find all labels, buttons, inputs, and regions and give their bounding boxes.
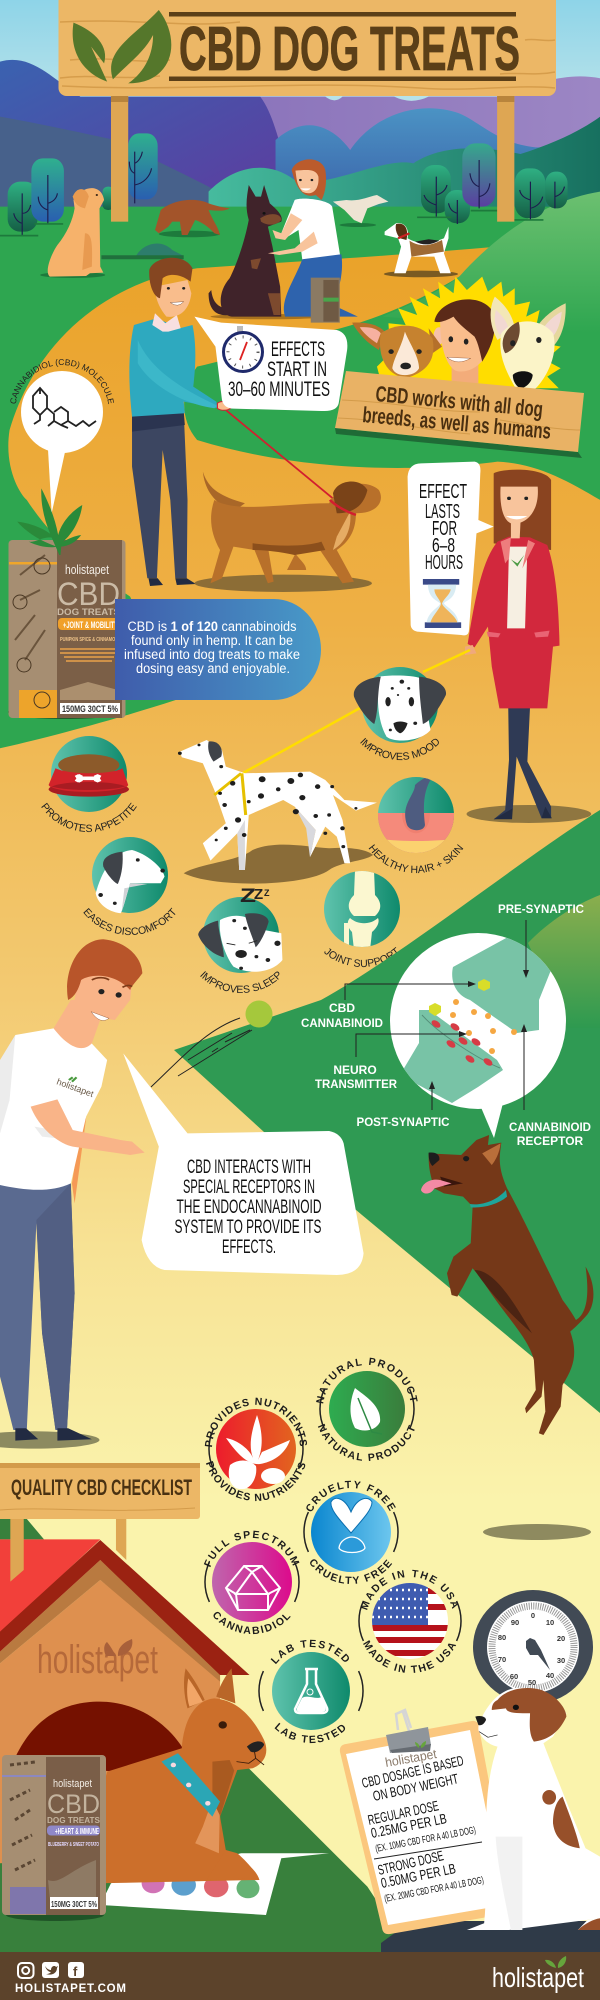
man head [67, 939, 142, 1020]
shadow [0, 1431, 100, 1449]
treat bag: joint and mobility: +JOINT & MOBILITY [63, 620, 118, 631]
neck [54, 1000, 107, 1048]
scale platform [381, 1921, 600, 1952]
treat bag: joint and mobility: DOG TREATS [57, 607, 120, 617]
pre-synaptic shape [452, 938, 550, 1033]
shadow [467, 805, 591, 823]
shadow [184, 845, 373, 884]
molecule callout [10, 359, 114, 512]
label: HEALTHY HAIR + SKIN [368, 844, 464, 874]
badge: made in the USA [358, 1570, 462, 1673]
badge: full spectrum cannabidiol: FULL SPECTRUM [204, 1530, 300, 1568]
speech bubble: effects start: EFFECTS [271, 338, 325, 361]
grass and green areas [0, 192, 600, 748]
man in white t-shirt: holistapet [55, 1076, 95, 1099]
speech bubble: endocannabinoid: CBD INTERACTS WITH [187, 1157, 311, 1178]
wall [0, 1580, 220, 1863]
icon: improves sleep [198, 886, 282, 993]
badge: natural product: NATURAL PRODUCT [318, 1424, 415, 1461]
shirt logo [69, 1077, 77, 1082]
speech bubble: effect lasts: FOR [432, 518, 457, 540]
quality checklist sign [0, 1463, 200, 1582]
man with leash [129, 258, 337, 586]
info box: cannabinoids: CBD is 1 of 120 cannabinoids [128, 619, 297, 634]
hair [494, 470, 551, 550]
badge: provides nutrients [204, 1398, 307, 1502]
callout tail [480, 1103, 503, 1138]
jumping dog shadow [483, 1524, 591, 1540]
icon: facebook: f [73, 1964, 78, 1979]
icon: facebook [68, 1962, 84, 1979]
treat bag: heart and immune [2, 1755, 106, 1921]
woman kneeling [268, 159, 358, 317]
treat bag: joint and mobility: CBD [57, 576, 120, 612]
house dog [99, 1668, 266, 1883]
treat bag: heart and immune: BLUEBERRY & SWEET POTATO [48, 1842, 99, 1848]
golden dog sitting [40, 188, 105, 278]
icon: stopwatch [224, 326, 262, 372]
clipboard text: CBD DOSAGE IS BASED [360, 1752, 465, 1791]
molecule diagram [33, 388, 96, 428]
synapse diagram: CANNABINOID [509, 1120, 591, 1134]
badge: made in the USA: MADE IN THE USA [363, 1640, 456, 1673]
clipboard logo: holistapet [384, 1746, 438, 1770]
info box: cannabinoids [115, 599, 321, 700]
scale dial: 80 [498, 1633, 506, 1642]
corgi face [352, 322, 442, 378]
badge: natural product: NATURAL PRODUCT [316, 1358, 418, 1404]
sweater [129, 318, 218, 417]
badge: made in the USA: MADE IN THE USA [360, 1570, 458, 1610]
icon: instagram [18, 1963, 34, 1978]
post-synaptic shape [400, 1010, 503, 1103]
green panel: endocannabinoid background [174, 810, 600, 1413]
roof [0, 1540, 250, 1675]
speech bubble: effect lasts: HOURS [425, 552, 463, 574]
wooden sign: CBD works [335, 371, 584, 458]
website: HOLISTAPET.COM [15, 1983, 126, 1995]
synapse diagram [301, 902, 591, 1148]
label: PROMOTES APPETITE [41, 802, 137, 832]
house logo: holistapet [37, 1638, 158, 1682]
clipboard text: 0.50MG PER LB [379, 1860, 457, 1891]
binder clip [396, 1710, 411, 1731]
greyhound running [333, 195, 388, 227]
icon: improves sleep: Z [264, 888, 270, 898]
speech bubble: effects start [194, 317, 347, 411]
speech bubble: effect lasts: 6–8 [432, 535, 455, 557]
icon: healthy hair and skin [368, 777, 464, 874]
clipboard text: REGULAR DOSE [366, 1797, 440, 1828]
clipboard text: 0.25MG PER LB [369, 1810, 448, 1841]
hand [465, 645, 476, 655]
treat bag: heart and immune: +HEART & IMMUNE [55, 1826, 99, 1836]
badge: cruelty free [303, 1480, 399, 1584]
speech bubble: endocannabinoid [123, 1053, 364, 1275]
badge: lab tested: LAB TESTED [274, 1722, 346, 1744]
scale dial: 50 [528, 1678, 536, 1687]
olive hill [528, 895, 600, 1028]
scale dial: 40 [546, 1671, 554, 1680]
scale dial: 0 [531, 1611, 535, 1620]
collar [152, 313, 181, 332]
zzz: Z [240, 886, 257, 907]
shirt [507, 547, 527, 628]
scale dial: 90 [511, 1618, 519, 1627]
clipboard text: (EX. 10MG CBD FOR A 40 LB DOG) [375, 1825, 477, 1855]
treat bag small [311, 278, 340, 323]
badge: full spectrum cannabidiol: CANNABIDIOL [214, 1612, 291, 1634]
synapse diagram: POST-SYNAPTIC [356, 1115, 450, 1129]
info box: cannabinoids: found only in hemp. It can be [131, 633, 293, 648]
brown dog sniffing [155, 200, 230, 237]
door [15, 1702, 183, 1772]
treat bag: joint and mobility [8, 540, 126, 719]
quality checklist sign: QUALITY CBD CHECKLIST [11, 1475, 192, 1500]
speech bubble: effects start: 30–60 MINUTES [228, 378, 330, 401]
arm [31, 1099, 145, 1155]
coat [468, 537, 560, 708]
dog on scale [467, 1688, 600, 1930]
roof red [0, 1539, 100, 1633]
synapse diagram: RECEPTOR [517, 1134, 584, 1148]
treat bag: heart and immune: 150MG 30CT 5% [51, 1900, 97, 1909]
callout circle [390, 933, 566, 1109]
checklist paper under dog [100, 1853, 329, 1915]
info box: cannabinoids: dosing easy and enjoyable. [136, 661, 290, 676]
speech bubble: effect lasts: EFFECT [419, 481, 467, 503]
ball and motion lines [151, 1000, 272, 1087]
treat bag: heart and immune: DOG TREATS [47, 1816, 101, 1825]
icon: promotes appetite [41, 736, 137, 832]
dog house and ground [0, 1517, 398, 1952]
speech bubble: effects start: START IN [267, 358, 327, 381]
scale dial [473, 1590, 593, 1704]
molecule label: CANNABIDIOL (CBD) MOLECULE [10, 359, 114, 404]
synapse diagram: CBD [329, 1001, 355, 1015]
label: IMPROVES SLEEP [200, 971, 280, 993]
treat bag: joint and mobility: PUMPKIN SPICE & CINNAMON [60, 637, 118, 643]
speech bubble: endocannabinoid: SPECIAL RECEPTORS IN [183, 1177, 315, 1198]
speech bubble: effect lasts: LASTS [425, 501, 460, 523]
hand [217, 402, 232, 410]
badge: provides nutrients: PROVIDES NUTRIENTS [206, 1461, 306, 1502]
icon: joint support [324, 871, 400, 968]
cannabis leaf [17, 488, 82, 555]
label: IMPROVES MOOD [360, 738, 439, 760]
treat bag: heart and immune: CBD [47, 1789, 100, 1819]
trousers [494, 627, 551, 819]
scale dial: 10 [546, 1618, 554, 1627]
man face [434, 299, 495, 383]
badge: provides nutrients: PROVIDES NUTRIENTS [204, 1398, 307, 1447]
badge: lab tested: LAB TESTED [270, 1640, 349, 1664]
footer [0, 1952, 600, 2000]
treat bag: joint and mobility: holistapet [65, 562, 109, 577]
icon: twitter [42, 1962, 59, 1978]
shirt [0, 1028, 107, 1190]
park trees [0, 133, 568, 258]
badge: cruelty free: CRUELTY FREE [310, 1559, 392, 1584]
title bars [169, 12, 516, 81]
synapse diagram: CANNABINOID [301, 1016, 383, 1030]
treat bag: joint and mobility: 150MG 30CT 5% [62, 704, 118, 714]
icon: improves mood [354, 667, 446, 760]
synapse diagram: TRANSMITTER [315, 1077, 397, 1091]
badge: cruelty free: CRUELTY FREE [306, 1480, 396, 1512]
clipboard text: STRONG DOSE [376, 1847, 445, 1878]
leash [227, 411, 337, 502]
badge: full spectrum cannabidiol [204, 1530, 300, 1634]
badge: lab tested [258, 1640, 364, 1744]
icon: leaf logo [73, 10, 171, 83]
info box: cannabinoids: infused into dog treats to make [124, 647, 300, 662]
clipboard text [360, 1752, 485, 1905]
leader lines [345, 920, 526, 1110]
treat bag: heart and immune: holistapet [53, 1778, 92, 1790]
doberman and woman [209, 159, 358, 323]
woman in red coat [465, 470, 591, 823]
icon: eases discomfort [83, 837, 176, 936]
scale dial: 30 [557, 1656, 565, 1665]
synapse diagram: NEURO [333, 1063, 377, 1077]
roof trim [0, 1560, 220, 1682]
clipboard text: (EX. 20MG CBD FOR A 40 LB DOG) [383, 1875, 485, 1905]
clipboard [340, 1710, 512, 1934]
ground [0, 1767, 398, 1952]
head [155, 280, 191, 317]
back green [0, 1517, 44, 1539]
bull terrier face [491, 297, 566, 390]
dalmatian [178, 740, 377, 884]
man in white t-shirt [0, 1000, 145, 1449]
speech bubble: endocannabinoid: EFFECTS. [222, 1237, 276, 1258]
scale dial: 70 [498, 1655, 506, 1664]
man smile [91, 1012, 109, 1021]
pants [132, 412, 188, 578]
background: sky [0, 0, 600, 215]
icon: starburst with dog and human faces [352, 277, 566, 390]
title sign board [58, 0, 556, 96]
icon: improves sleep: Z [254, 886, 263, 903]
scale dial: 60 [510, 1672, 518, 1681]
jumping dog [421, 1135, 593, 1435]
body [180, 740, 377, 870]
beagle [384, 223, 458, 277]
trousers [0, 1183, 75, 1430]
speech bubble: endocannabinoid: THE ENDOCANNABINOID [176, 1197, 322, 1218]
clipboard text: ON BODY WEIGHT [371, 1770, 460, 1804]
doberman [209, 185, 325, 319]
speech bubble: endocannabinoid: SYSTEM TO PROVIDE ITS [174, 1217, 322, 1238]
brown dog on leash [194, 472, 381, 592]
badge: natural product [316, 1358, 418, 1461]
scale dial: 20 [557, 1634, 565, 1643]
speech bubble: effect lasts [408, 462, 494, 635]
labels: PRE-SYNAPTIC [498, 902, 584, 916]
yellow leash [243, 650, 470, 773]
label: JOINT SUPPORT [324, 947, 397, 968]
label: EASES DISCOMFORT [83, 908, 176, 936]
sign posts [111, 96, 514, 222]
icon: hourglass [423, 579, 461, 628]
mountains [0, 60, 600, 213]
face [500, 487, 538, 538]
